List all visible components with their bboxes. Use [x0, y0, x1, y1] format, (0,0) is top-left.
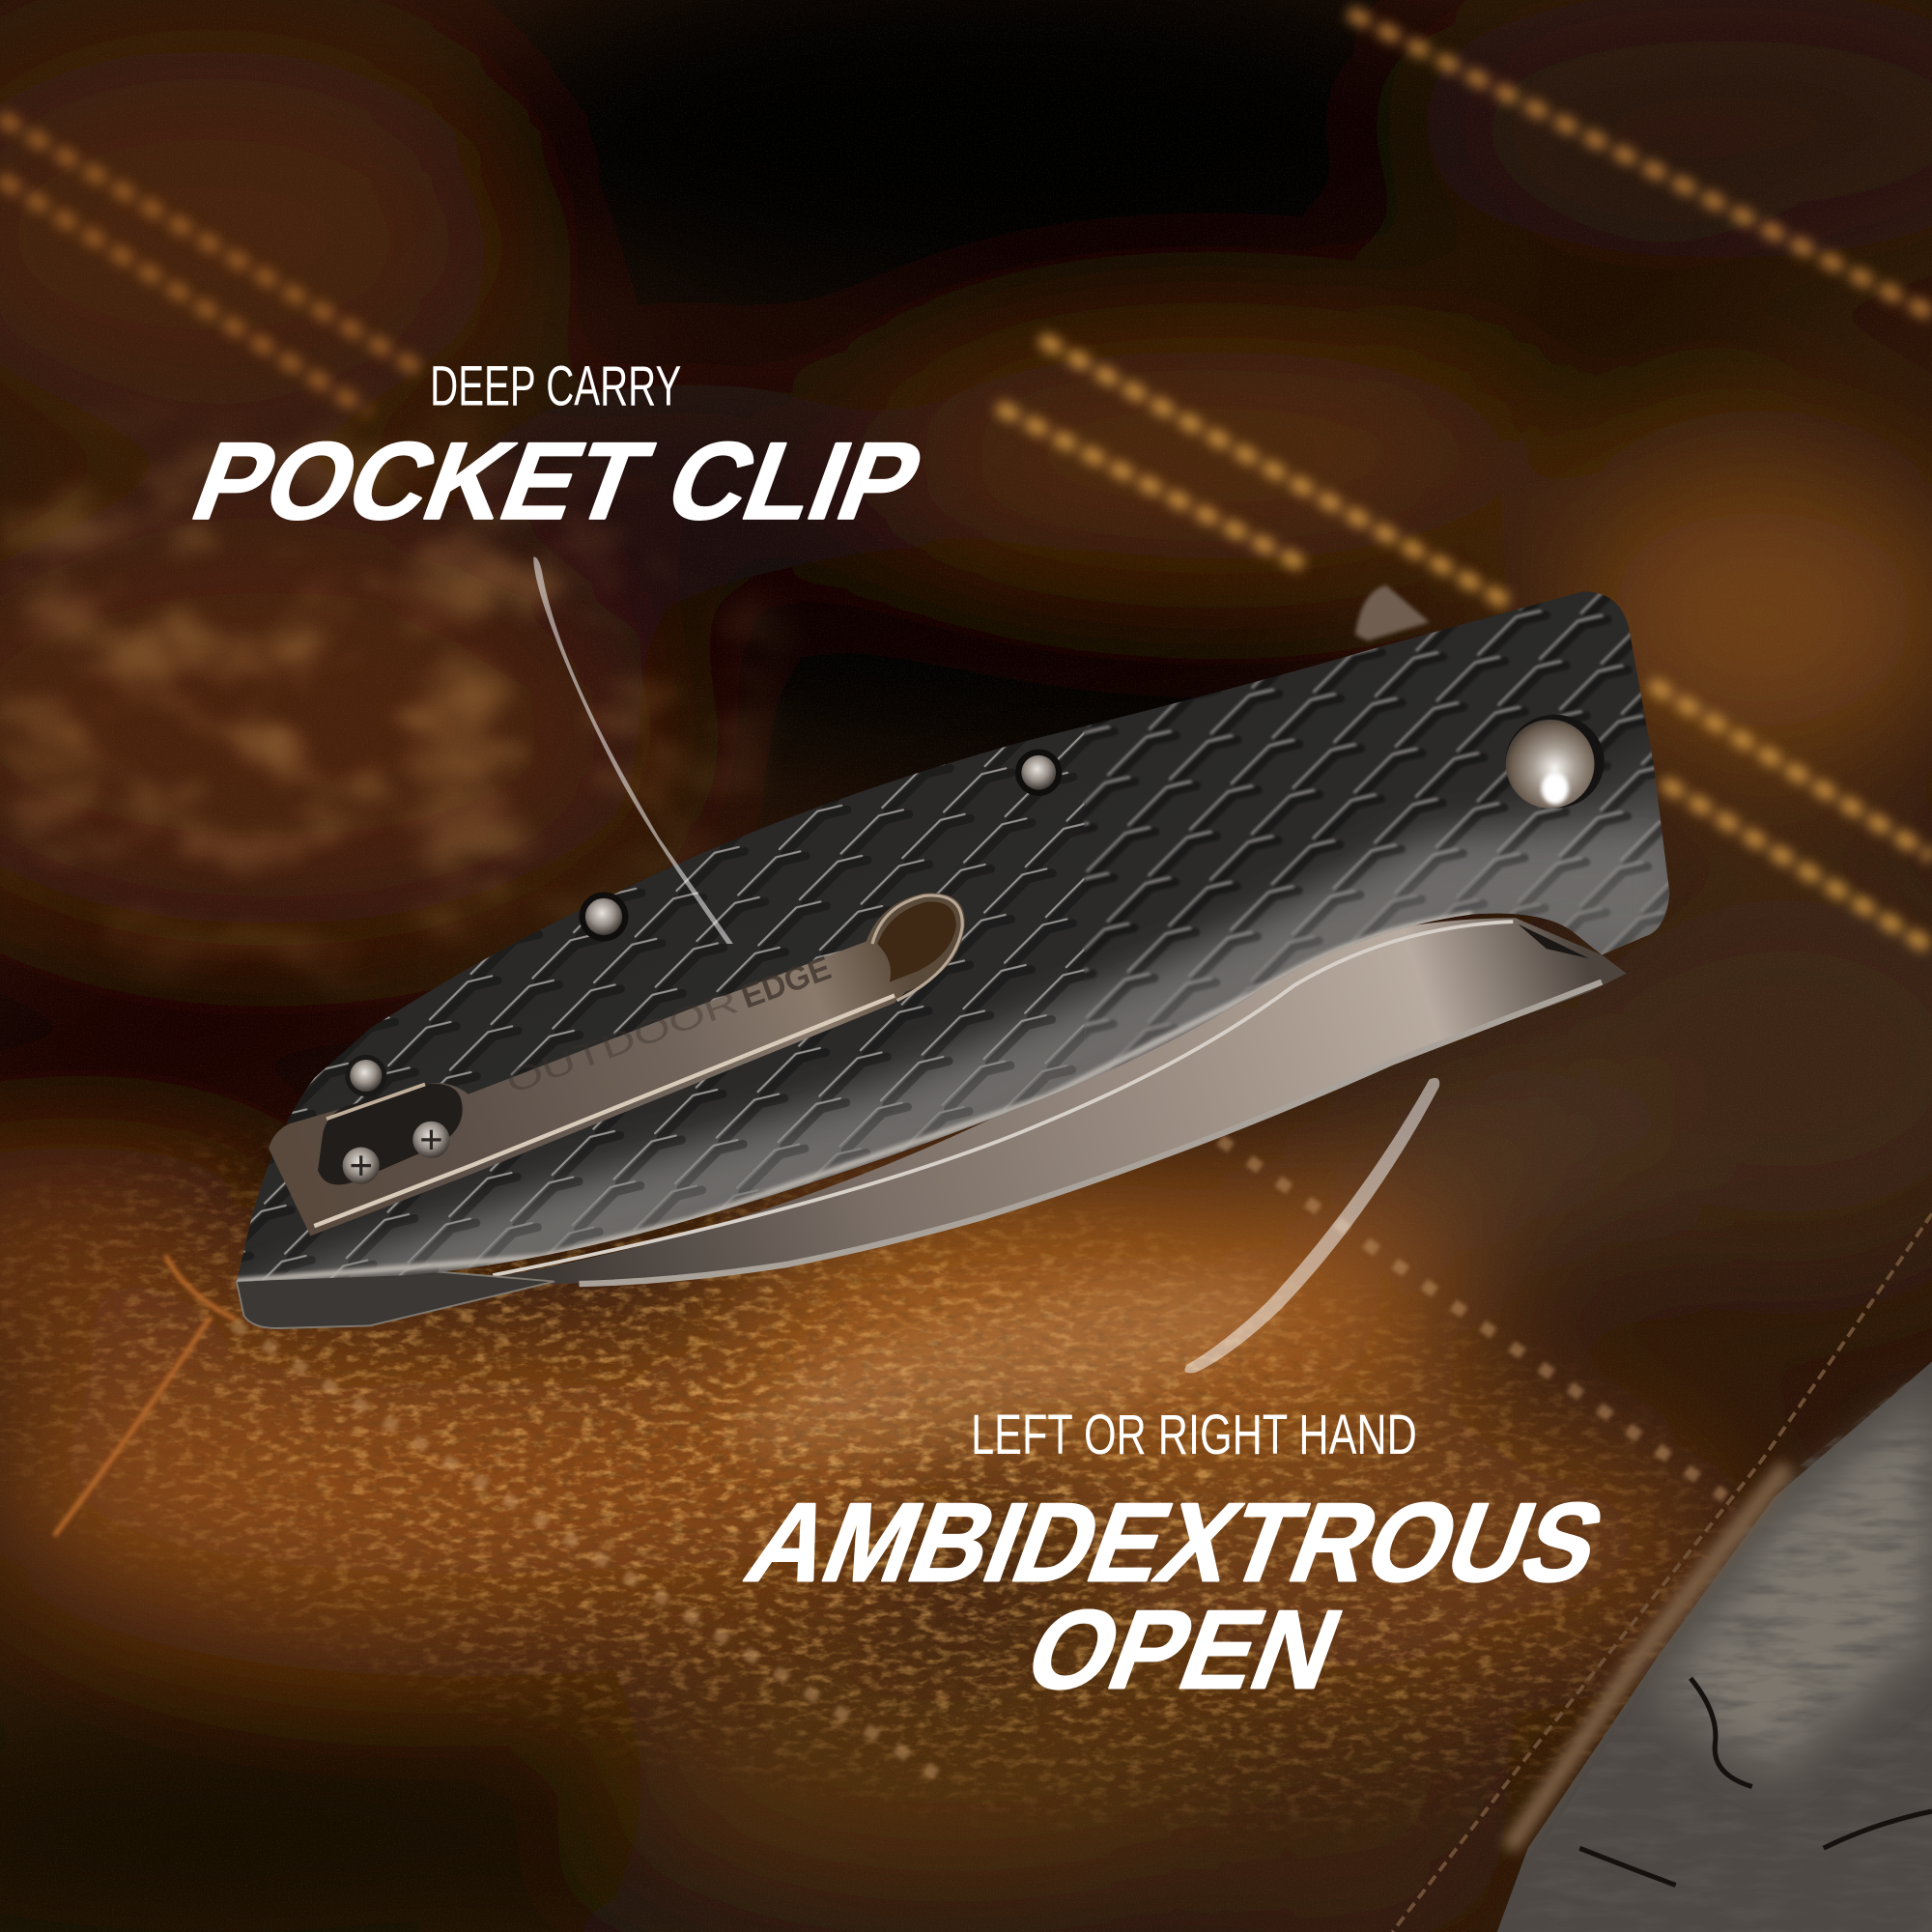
out of focus mottling	[0, 416, 783, 981]
thumb stud	[1355, 585, 1430, 640]
pivot screw	[1506, 715, 1605, 809]
handle screw: top left	[579, 892, 629, 941]
callout: pocket clip	[178, 355, 938, 944]
clip screw: upper	[412, 1122, 450, 1158]
shadow under knife	[234, 640, 1343, 1182]
label: deep carry: DEEP CARRY	[430, 355, 681, 418]
leather grain	[0, 1143, 1735, 1830]
handle screw: middle	[1015, 750, 1062, 796]
knife	[124, 542, 1725, 1355]
haze on leather	[721, 1239, 1300, 1496]
clip logo: OUTDOOR	[501, 983, 743, 1101]
heading: pocket clip: POCKET CLIP	[178, 420, 938, 543]
wooden surface corner	[1392, 1213, 1932, 1932]
heading: ambidextrous: AMBIDEXTROUS	[731, 1481, 1620, 1605]
clip logo	[501, 950, 836, 1101]
handle	[124, 542, 1725, 1355]
pointer line: ambidextrous	[1184, 1078, 1439, 1373]
label: left or right hand: LEFT OR RIGHT HAND	[971, 1404, 1417, 1466]
heading: open: OPEN	[1010, 1588, 1357, 1713]
blade	[469, 918, 1627, 1284]
handle screw: bottom left	[345, 1055, 387, 1096]
lower liner and tip	[237, 1269, 554, 1328]
callout: ambidextrous open	[731, 1078, 1620, 1713]
leather dark grain	[133, 1248, 1559, 1728]
pocket clip	[269, 893, 965, 1236]
clip screw: lower	[343, 1148, 380, 1184]
clip logo: EDGE	[736, 950, 836, 1016]
pointer line: pocket clip	[533, 556, 733, 944]
